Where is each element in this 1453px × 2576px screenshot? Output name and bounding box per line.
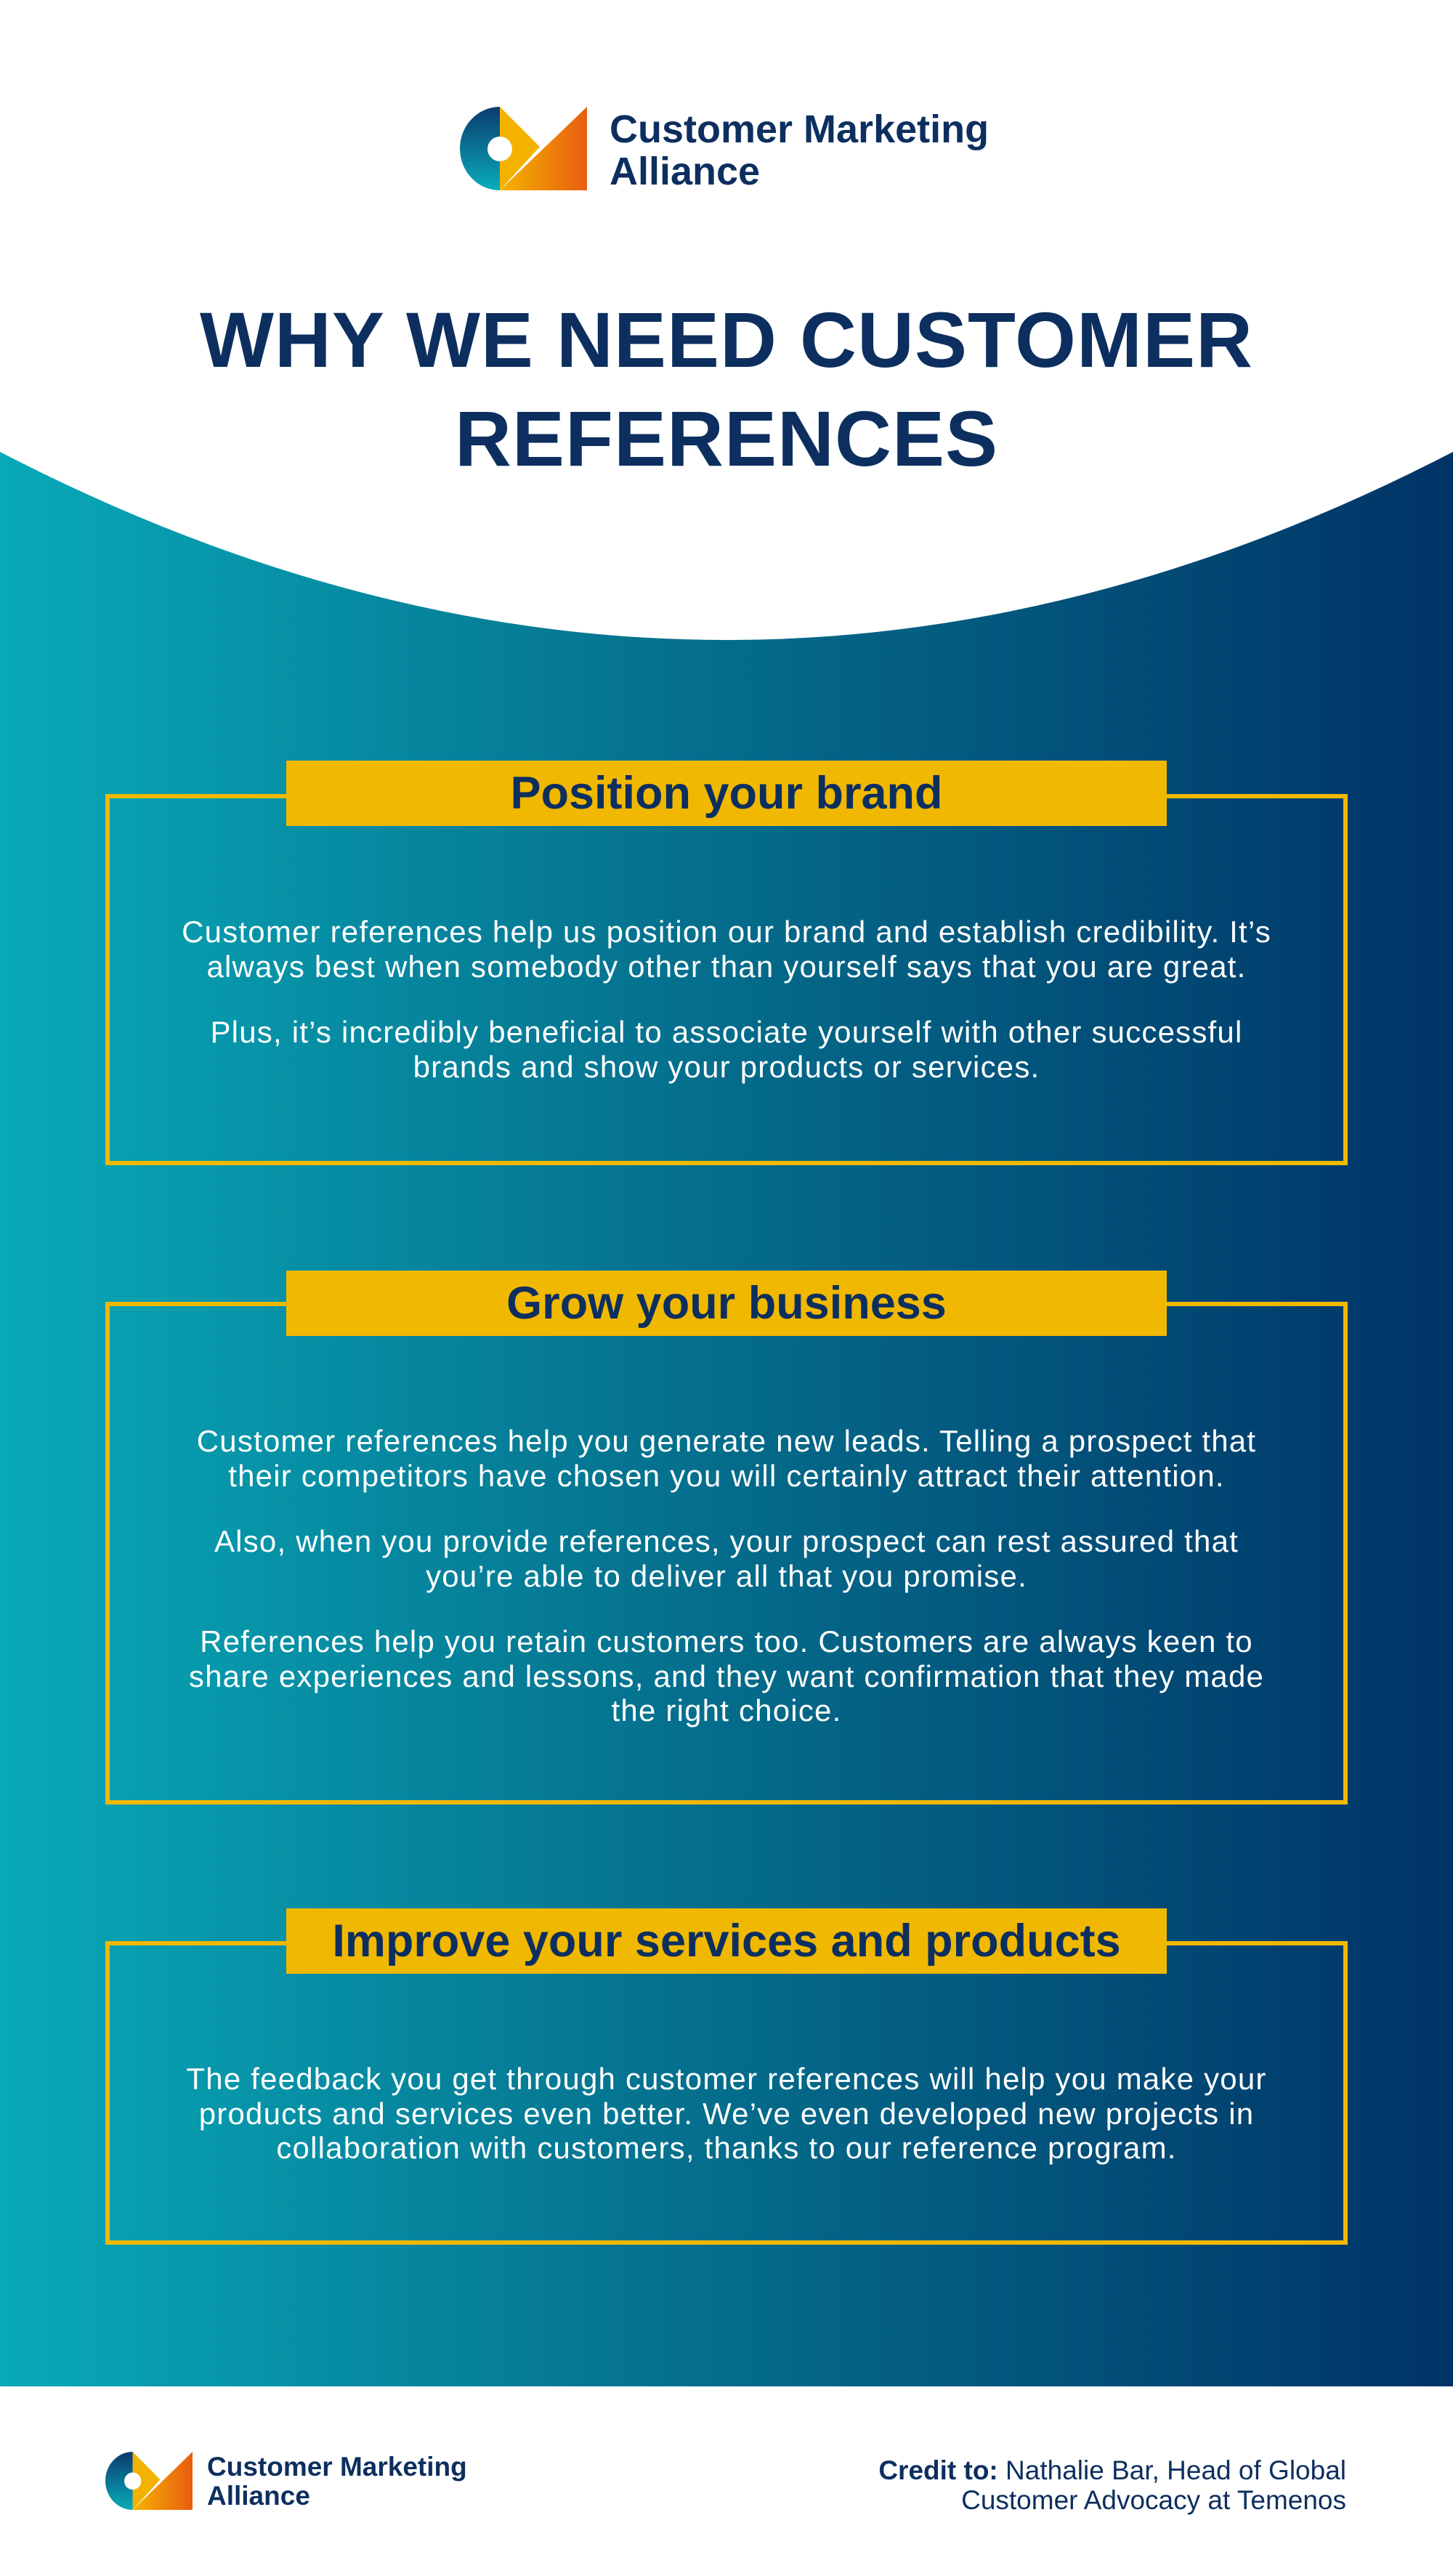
text block	[186, 2062, 1267, 2165]
credit	[878, 2455, 1346, 2515]
icon: logo mark	[460, 107, 587, 190]
credit: Customer Advocacy at Temenos	[961, 2485, 1346, 2515]
heading: grow your business	[286, 1271, 1167, 1336]
panel: improve your services and products	[105, 1908, 1348, 2245]
logo text: Customer Marketing	[610, 108, 989, 151]
icon: footer logo mark	[105, 2452, 193, 2510]
text block: products and services even better. We’ve even developed new projects in	[199, 2097, 1254, 2130]
text block: always best when somebody other than yourself says that you are great.	[206, 949, 1247, 984]
text block: the right choice.	[612, 1693, 841, 1728]
heading: position your brand	[286, 761, 1167, 826]
text block: The feedback you get through customer references will help you make your	[186, 2062, 1267, 2096]
header logo	[460, 107, 989, 193]
text block: Customer references help you generate new leads. Telling a prospect that	[197, 1424, 1256, 1458]
heading: grow your business: Grow your business	[506, 1278, 947, 1329]
text block: collaboration with customers, thanks to our reference program.	[276, 2131, 1177, 2165]
credit: Credit to: Nathalie Bar, Head of Global	[878, 2455, 1346, 2485]
text block: References help you retain customers too. Customers are always keen to	[200, 1624, 1253, 1658]
text block: Plus, it’s incredibly beneficial to associate yourself with other successful	[210, 1015, 1243, 1049]
text block: Customer references help us position our brand and establish credibility. It’s	[182, 915, 1271, 949]
heading: improve: Improve your services and products	[332, 1916, 1121, 1967]
white curve	[0, 436, 1453, 640]
footer logo text	[207, 2452, 467, 2511]
text block	[189, 1424, 1264, 1728]
heading: position your brand: Position your brand	[510, 768, 943, 819]
title	[200, 296, 1253, 482]
text block: brands and show your products or services.	[413, 1049, 1040, 1084]
logo text	[610, 108, 989, 193]
title: REFERENCES	[455, 394, 998, 482]
heading: improve	[286, 1908, 1167, 1974]
text block: Also, when you provide references, your prospect can rest assured that	[214, 1524, 1239, 1558]
text block: their competitors have chosen you will certainly attract their attention.	[228, 1459, 1225, 1492]
footer logo	[105, 2452, 467, 2511]
footer logo text: Customer Marketing	[207, 2452, 467, 2482]
panel: grow your business	[105, 1271, 1348, 1805]
text block: share experiences and lessons, and they want confirmation that they made	[189, 1659, 1264, 1693]
logo text: Alliance	[610, 150, 760, 193]
text block	[182, 915, 1271, 1084]
background gradient with curve	[0, 436, 1453, 2386]
footer logo text: Alliance	[207, 2481, 310, 2511]
title: WHY WE NEED CUSTOMER	[200, 296, 1253, 384]
text block: you’re able to deliver all that you promise.	[426, 1559, 1027, 1592]
panel: position your brand	[105, 761, 1348, 1165]
